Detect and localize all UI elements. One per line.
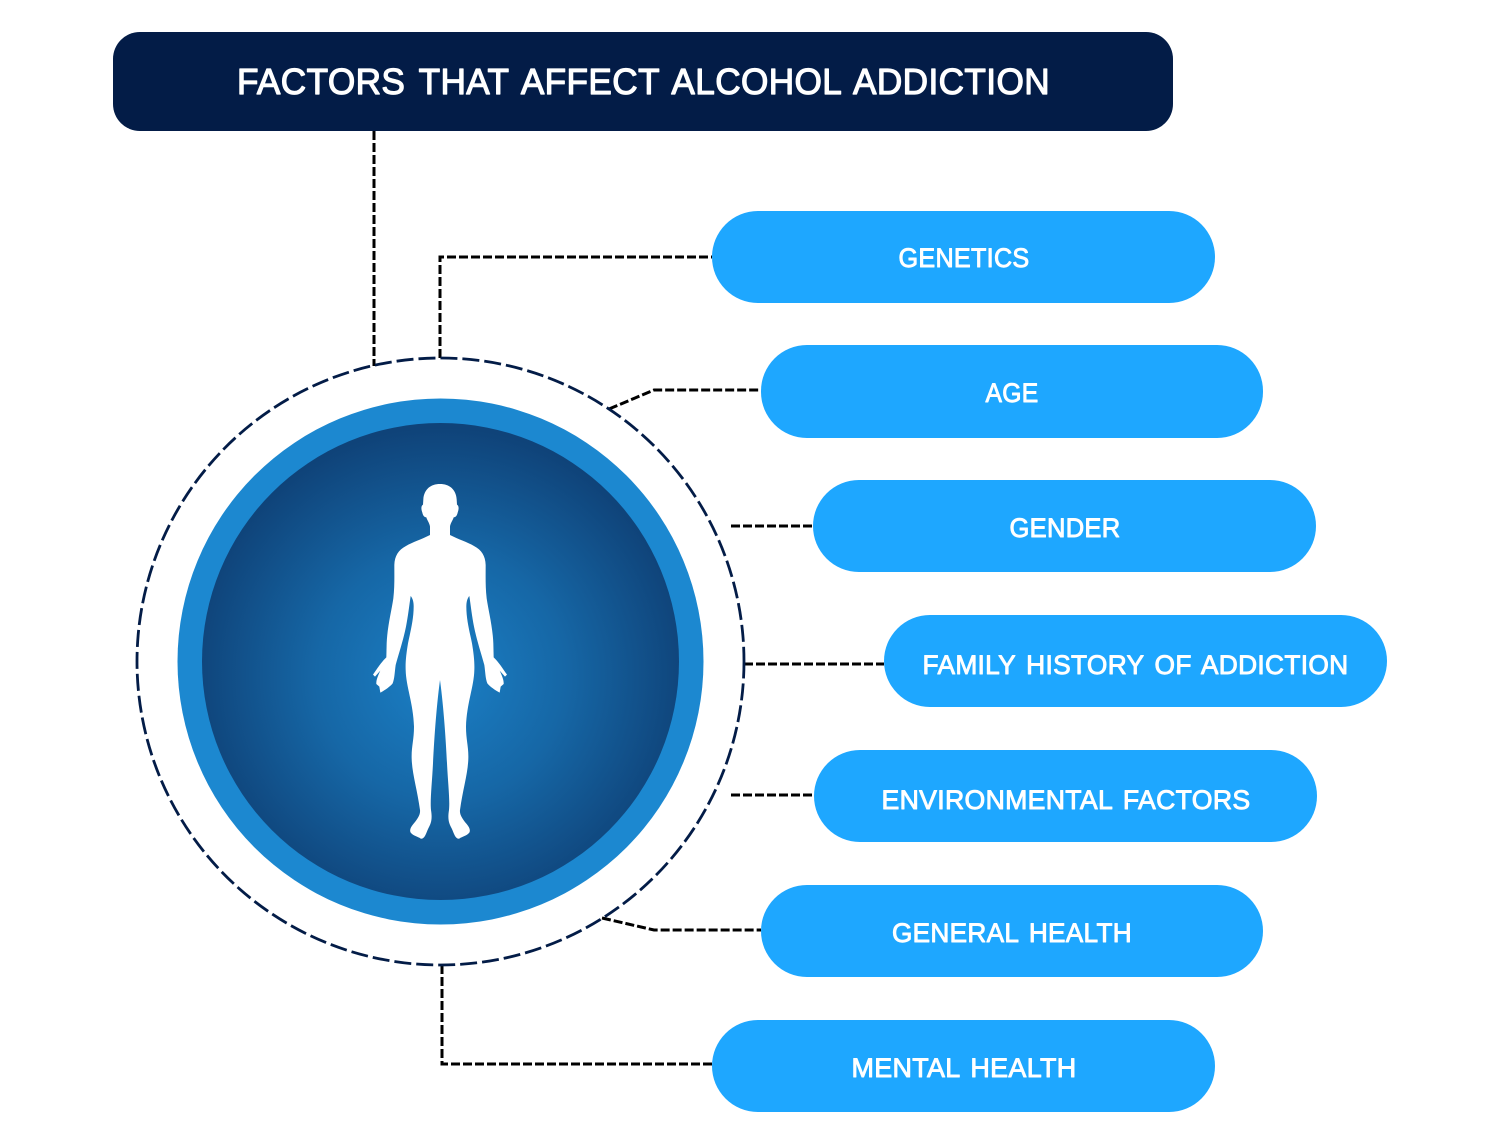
pill: environmental factors [814,750,1317,842]
outer dashed ring [137,358,744,965]
connector: mental health [442,965,712,1064]
central circle with body figure [178,398,704,924]
connector: title to circle [372,131,376,366]
connector: gender [731,524,813,528]
connector: age [609,390,761,409]
pill: mental health: MENTAL HEALTH [852,1053,1076,1083]
connector: general health [602,918,761,930]
ring: medium blue [178,398,704,924]
pill: age [761,345,1263,438]
pill: family history of addiction [884,615,1387,707]
title banner: FACTORS THAT AFFECT ALCOHOL ADDICTION [237,61,1050,102]
icon: human body silhouette [373,484,507,839]
pill: family history of addiction: FAMILY HISTORY OF ADDICTION [922,650,1348,680]
pill: mental health [712,1020,1215,1112]
pill: genetics: GENETICS [898,243,1030,273]
pill: gender: GENDER [1010,513,1120,543]
title banner [113,32,1173,131]
pill: age: AGE [986,378,1038,408]
pill: environmental factors: ENVIRONMENTAL FACTORS [882,785,1250,815]
pill: general health [761,885,1263,977]
connector: environmental factors [731,794,814,796]
pill: gender [813,480,1316,572]
connector: genetics [440,257,712,358]
disc: radial gradient [202,423,679,900]
pill: general health: GENERAL HEALTH [892,918,1132,948]
connector: family history of addiction [744,662,884,666]
pill: genetics [712,211,1215,303]
